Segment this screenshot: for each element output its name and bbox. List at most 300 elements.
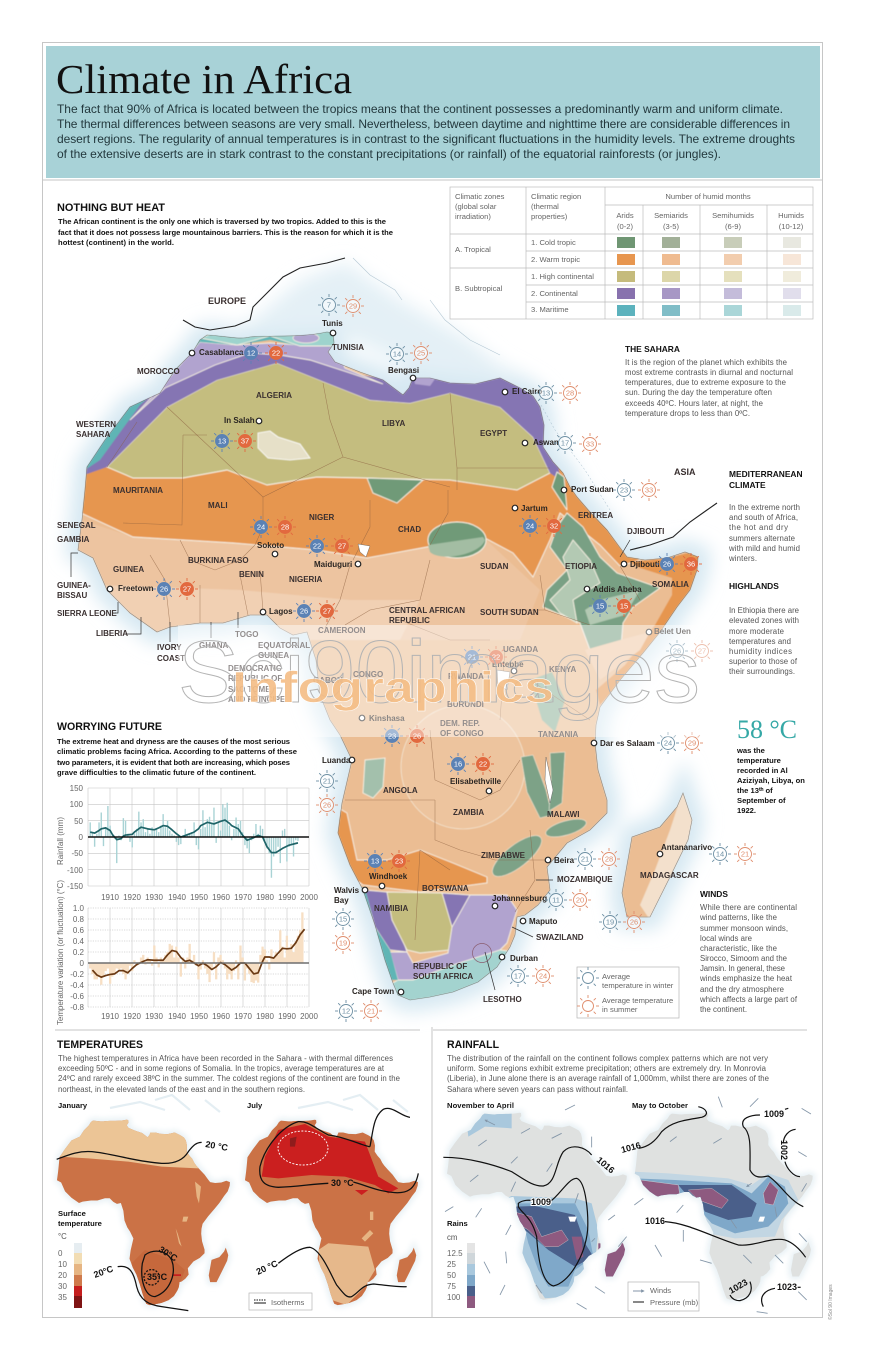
sun icon legend: temperature in winter (602, 981, 674, 990)
region labels west and north: TUNISIA (332, 343, 364, 352)
temperature trend line (92, 929, 305, 977)
highlands text block: In Ethiopia there are (729, 606, 799, 615)
climate zones table: A. Tropical (455, 245, 491, 254)
city names: Bay (334, 896, 349, 905)
country borders (107, 383, 640, 940)
rainfall chart: 1910 (101, 893, 119, 902)
region labels west and north: IVORY (157, 643, 182, 652)
region labels west and north: SAHARA (76, 430, 110, 439)
climate zones table: irradiation) (455, 212, 491, 221)
worrying future text block: WORRYING FUTURE (57, 721, 162, 733)
region labels west and north: REPUBLIC OF (228, 674, 282, 683)
temperature suns: 36 (687, 560, 695, 569)
temperature suns: 26 (160, 585, 168, 594)
city names: Johannesburg (492, 894, 547, 903)
climate zones table: (3-5) (663, 222, 679, 231)
region labels west and north (57, 296, 699, 1004)
temperature variation chart: 1970 (234, 1012, 252, 1021)
region labels west and north: SOMALIA (652, 580, 689, 589)
table swatches (617, 237, 801, 316)
Mediterranean climate text block: CLIMATE (729, 480, 766, 490)
temperature suns: 21 (367, 1007, 375, 1016)
isotherm labels July: 20 °C (255, 1258, 280, 1277)
rainfall heading and text: RAINFALL (447, 1039, 499, 1051)
climate zones table: Semihumids (712, 211, 754, 220)
temperature suns: 16 (454, 760, 462, 769)
region labels west and north: GABON (313, 676, 343, 685)
rains legend: 25 (447, 1260, 456, 1269)
Malawi and Zimbabwe green (487, 752, 588, 883)
rainfall chart: 1950 (190, 893, 208, 902)
city names: El Cairo (512, 387, 542, 396)
nothing but heat text block: hottest (continent) in the world. (58, 238, 174, 247)
Kenya green (530, 672, 565, 732)
temperature suns: 11 (552, 896, 560, 905)
nothing but heat text block: The African continent is the only one which is traversed by two tropics. Added to this is the (58, 217, 386, 226)
region labels west and north: ZAMBIA (453, 808, 484, 817)
the Sahara text block: most extreme contrasts in diurnal and nocturnal (625, 368, 793, 377)
temperature axis labels: 0.6 (73, 926, 85, 935)
temperature suns: 13 (218, 437, 226, 446)
temperature suns: 21 (581, 855, 589, 864)
sun icon legend: Average (602, 972, 630, 981)
city names: Jartum (521, 504, 548, 513)
rainfall chart: 1960 (212, 893, 230, 902)
watermark text: Sci90images (178, 622, 700, 721)
rains legend: cm (447, 1233, 457, 1242)
temperature suns: 29 (688, 739, 696, 748)
rainfall axis labels: 0 (79, 833, 84, 842)
region labels west and north: BOTSWANA (422, 884, 469, 893)
temperature axis labels: 0.4 (73, 937, 85, 946)
highlands text block: more moderate (729, 627, 784, 636)
worrying future text block: grave difficulties to the climatic future of the continent. (57, 768, 256, 777)
region labels west and north: REPUBLIC (389, 616, 430, 625)
region labels west and north: RWANDA (448, 672, 484, 681)
sun icon legend: in summer (602, 1005, 638, 1014)
region labels west and north: DJIBOUTI (627, 527, 664, 536)
temperature variation chart: 1920 (123, 1012, 141, 1021)
rainfall axis labels: -100 (67, 866, 84, 875)
rainfall chart: Rainfall (mm) (56, 817, 65, 865)
leader lines (71, 540, 630, 990)
region labels west and north: EUROPE (208, 296, 246, 306)
the Sahara text block: THE SAHARA (625, 344, 680, 354)
climate zones table: (6-9) (725, 222, 741, 231)
temperature axis labels: -0.2 (70, 970, 85, 979)
temperature suns: 14 (393, 350, 401, 359)
temperature variation chart: 1950 (190, 1012, 208, 1021)
temperature suns: 26 (630, 918, 638, 927)
temperatures heading and text: 24ºC and rarely exceed 38ºC in the summer. The coldest regions of the continent are found in the (58, 1074, 400, 1083)
rivers and lakes (358, 544, 553, 803)
region labels west and north: LIBYA (382, 419, 405, 428)
temperature suns: 13 (542, 389, 550, 398)
worrying future text block: climatic problems facing Africa. According to the patterns of these (57, 747, 297, 756)
temperature suns: 28 (566, 389, 574, 398)
Somalia coastal orange (596, 550, 702, 705)
temperature axis labels: 0.2 (73, 948, 85, 957)
continent with climate zones (60, 320, 702, 1010)
temperature suns: 26 (673, 647, 681, 656)
rainfall axis labels: 100 (70, 800, 84, 809)
warm tropic arid band (82, 467, 641, 578)
surface temperature legend: 0 (58, 1249, 63, 1258)
central Africa light zone (401, 705, 525, 829)
temperature suns: 20 (576, 896, 584, 905)
temperature record callout: the 13ᵗʰ of (737, 786, 773, 795)
intro text: desert regions. The regularity of annual temperatures is in contrast to the significant fluctuations in the humidity levels. The extreme droughts (57, 132, 795, 146)
temperatures heading and text: northeast, in the elevated lands of the east and in the southern regions. (58, 1085, 305, 1094)
region labels west and north: OF CONGO (440, 729, 484, 738)
November to April rain map (443, 1104, 630, 1310)
southern continental zones (365, 890, 407, 952)
temperature record callout: recorded in Al (737, 766, 788, 775)
temperature axis labels: 0.8 (73, 915, 85, 924)
sea halo (78, 262, 698, 1000)
winds text block: Jamsin. In general, these (700, 964, 785, 973)
city names: Freetown (118, 584, 154, 593)
temperature suns: 24 (664, 739, 672, 748)
isotherm labels January: 20°C (92, 1263, 115, 1280)
city names: Casablanca (199, 348, 244, 357)
city names: Tunis (322, 319, 343, 328)
region labels west and north: EGYPT (480, 429, 507, 438)
climate zones table: 1. Cold tropic (531, 238, 576, 247)
May to October rain map (620, 1097, 825, 1315)
climate zones table: (global solar (455, 202, 497, 211)
the Sahara text block: It is the region of the planet which exhibits the (625, 358, 787, 367)
isotherm labels January: 20 °C (205, 1139, 229, 1153)
rainfall heading and text: November to April (447, 1101, 514, 1110)
rainfall chart (56, 784, 318, 902)
winds arrows and pressure (443, 1105, 627, 1309)
region labels west and north: NAMIBIA (374, 904, 408, 913)
temperature record callout: was the (736, 746, 765, 755)
temperature axis labels: -0.6 (70, 992, 85, 1001)
region labels west and north: SAO TOME (228, 685, 271, 694)
climate zones table: 3. Maritime (531, 305, 569, 314)
climate zones table: 2. Warm tropic (531, 255, 580, 264)
main climate map of Africa (57, 258, 756, 1022)
region labels west and north: BURKINA FASO (188, 556, 249, 565)
temperature variation chart (56, 880, 318, 1025)
temperature suns: 27 (338, 542, 346, 551)
region labels west and north: BISSAU (57, 591, 87, 600)
temperature suns: 22 (272, 349, 280, 358)
region labels west and north: GUINEA (258, 651, 289, 660)
rainfall chart: 1990 (278, 893, 296, 902)
July temperature map (240, 1095, 430, 1315)
rains legend: 75 (447, 1282, 456, 1291)
region labels west and north: TANZANIA (538, 730, 579, 739)
region labels west and north: CONGO (353, 670, 383, 679)
the Sahara text block: sun. During the day the temperature often (625, 388, 772, 397)
rainfall chart: 2000 (300, 893, 318, 902)
region labels west and north: DEMOCRATIC (228, 664, 282, 673)
pressure labels May-Oct: 1023 (777, 1282, 797, 1292)
temperature suns: 33 (586, 440, 594, 449)
highlands text block: humidity indices (729, 647, 792, 656)
climate zones table: B. Subtropical (455, 284, 503, 293)
region labels west and north: GUINEA- (57, 581, 91, 590)
surface temperature legend: 35 (58, 1293, 67, 1302)
rainfall axis labels: 50 (74, 817, 84, 826)
pressure labels May-Oct: 1016 (645, 1216, 665, 1226)
region labels west and north: SIERRA LEONE (57, 609, 117, 618)
city names: Lagos (269, 607, 293, 616)
temperatures heading and text: exceeding 50ºC - and in some regions of Somalia. In the tropics, average temperatures are at (58, 1064, 385, 1073)
region labels west and north: MOZAMBIQUE (557, 875, 613, 884)
climate zones table: Semiarids (654, 211, 688, 220)
city names: Djibouti (630, 560, 660, 569)
climate zones table: (10-12) (779, 222, 804, 231)
July isotherms (260, 1108, 418, 1297)
temperatures heading and text: The highest temperatures in Africa have been recorded in the Sahara - with thermal differences (58, 1054, 393, 1063)
sun icon legend: Average temperature (602, 996, 673, 1005)
region labels west and north: TOGO (235, 630, 258, 639)
Sahara high continental zone (107, 363, 550, 490)
rainfall axis labels: -150 (67, 882, 84, 891)
temperature suns: 24 (257, 523, 265, 532)
city names: Port Sudan (571, 485, 614, 494)
Mediterranean climate text block: and south of Africa, (729, 513, 798, 522)
watermark lightened band (178, 625, 723, 737)
climate zones table: (0-2) (617, 222, 633, 231)
city names: Sokoto (257, 541, 284, 550)
temperature suns: 26 (663, 560, 671, 569)
temperature variation chart: 1960 (212, 1012, 230, 1021)
rains legend: 100 (447, 1293, 461, 1302)
city names: Dar es Salaam (600, 739, 655, 748)
highlands text block: their surroundings. (729, 667, 795, 676)
temperature bars (90, 912, 305, 985)
temperature suns: 27 (323, 607, 331, 616)
Angola green (363, 758, 385, 798)
isotherms legend (249, 1293, 312, 1310)
temperature suns: 33 (645, 486, 653, 495)
January temperature map (54, 1094, 234, 1312)
climate zones table: Number of humid months (665, 192, 751, 201)
pressure labels Nov-Apr: 1016 (595, 1155, 616, 1175)
rainfall trend line (90, 820, 298, 853)
rainfall chart: 1920 (123, 893, 141, 902)
region labels west and north: DEM. REP. (440, 719, 480, 728)
temperature suns: 12 (247, 349, 255, 358)
isotherm labels July: 30 °C (331, 1178, 354, 1188)
credit: ©Sol 90 Images (827, 1284, 834, 1320)
isotherms legend: Isotherms (271, 1298, 305, 1307)
climate zones table (450, 187, 813, 319)
city names: In Salah (224, 416, 255, 425)
intro text: of the extensive deserts are in stark contrast to the constant precipitations (or rainfall) of the equatorial rainforests (or jungles). (57, 147, 721, 161)
rainfall heading and text: (Liberia), in June alone there is an average rainfall of 1,000mm, whilst there are zones of the (447, 1074, 769, 1083)
rainfall heading and text: Sahara where seven years can pass without rainfall. (447, 1085, 628, 1094)
temperature suns: 26 (413, 732, 421, 741)
worrying future text block: two parameters, it is evident that both are increasing, which poses (57, 758, 290, 767)
temperature axis labels: -0.4 (70, 981, 85, 990)
region labels west and north: ETIOPIA (565, 562, 597, 571)
city names: Maiduguri (314, 560, 352, 569)
temperature suns: 19 (339, 939, 347, 948)
pressure labels May-Oct: 1023 (727, 1277, 749, 1296)
temperature suns: 29 (349, 302, 357, 311)
region labels west and north: GAMBIA (57, 535, 90, 544)
winds text block: While there are continental (700, 903, 797, 912)
rains legend: 12.5 (447, 1249, 463, 1258)
section dividers (55, 1027, 807, 1318)
temperature variation chart: 1940 (168, 1012, 186, 1021)
rainfall chart: 1970 (234, 893, 252, 902)
city names: Cape Town (352, 987, 394, 996)
city names: Durban (510, 954, 538, 963)
surface temperature legend: 10 (58, 1260, 67, 1269)
temperature suns: 17 (514, 972, 522, 981)
climate zones table: Climatic zones (455, 192, 505, 201)
watermark text: Infographics (232, 663, 554, 712)
the Sahara text block: exceeds 40ºC. Hours later, at night, the (625, 399, 763, 408)
climate zones table: Arids (616, 211, 634, 220)
temperature suns: 21 (741, 850, 749, 859)
region labels west and north: ERITREA (578, 511, 613, 520)
temperatures heading and text: January (58, 1101, 88, 1110)
temperature suns: 23 (395, 857, 403, 866)
region labels west and north: ANGOLA (383, 786, 418, 795)
region labels west and north: SOUTH SUDAN (480, 608, 539, 617)
city names: Elisabethville (450, 777, 502, 786)
surface temperature legend: temperature (58, 1219, 102, 1228)
southern arid zone (330, 803, 487, 892)
temperature suns: 37 (241, 437, 249, 446)
city names: Entebbe (492, 660, 524, 669)
region labels west and north: EQUATORIAL (258, 641, 310, 650)
region labels west and north: SENEGAL (57, 521, 96, 530)
worrying future text block (57, 721, 297, 777)
temperature suns: 17 (561, 439, 569, 448)
region labels west and north: SWAZILAND (536, 933, 584, 942)
highlands text block: superior to those of (729, 657, 798, 666)
Mediterranean climate text block (728, 469, 803, 563)
region labels west and north: BENIN (239, 570, 264, 579)
temperature suns: 26 (323, 801, 331, 810)
pressure labels May-Oct: 1009 (764, 1109, 784, 1119)
winds and pressure legend: Pressure (mb) (650, 1298, 699, 1307)
rains legend: 50 (447, 1271, 456, 1280)
temperature record callout: 58 °C (737, 715, 797, 744)
Madagascar east light strip (640, 794, 692, 918)
rainfall axis labels: -50 (71, 849, 84, 858)
temperature variation chart: 1990 (278, 1012, 296, 1021)
temperature axis labels: 1.0 (73, 904, 85, 913)
temperature variation chart: 1910 (101, 1012, 119, 1021)
winds and pressure legend: Winds (650, 1286, 671, 1295)
temperature record callout: September of (737, 796, 786, 805)
nothing but heat text block (57, 202, 393, 247)
region labels west and north: CHAD (398, 525, 421, 534)
temperature suns: 32 (550, 522, 558, 531)
temperature variation chart: 1930 (145, 1012, 163, 1021)
city names: Kinshasa (369, 714, 405, 723)
city markers (107, 330, 663, 995)
region labels west and north: BURUNDI (447, 700, 484, 709)
region labels west and north: MAURITANIA (113, 486, 163, 495)
rainfall axis labels: 150 (70, 784, 84, 793)
nothing but heat text block: fact that it does not possess large mountainous barriers. This is the reason for which it is the (58, 228, 393, 237)
surface temperature legend: 30 (58, 1282, 67, 1291)
rainfall bars (90, 803, 298, 878)
region labels west and north: MOROCCO (137, 367, 180, 376)
climate zones table: 2. Continental (531, 289, 578, 298)
winds text block: wind patterns, like the (699, 913, 777, 922)
region labels west and north: CAMEROON (318, 626, 366, 635)
temperatures heading and text: July (247, 1101, 263, 1110)
temperature variation chart: 1980 (256, 1012, 274, 1021)
region labels west and north: UGANDA (503, 645, 538, 654)
rainfall heading and text: uniform. Some regions exhibit extreme precipitation; others are extremely dry. In Monrovia (447, 1064, 767, 1073)
city names: Antananarivo (661, 843, 712, 852)
maritime zone (86, 336, 331, 469)
temperature suns: 15 (339, 915, 347, 924)
nothing but heat text block: NOTHING BUT HEAT (57, 202, 165, 214)
region labels west and north: CENTRAL AFRICAN (389, 606, 465, 615)
city names: Windhoek (369, 872, 408, 881)
title: Climate in Africa (56, 56, 352, 102)
temperature suns: 22 (313, 542, 321, 551)
city names: Belet Uen (654, 627, 691, 636)
region labels west and north: LESOTHO (483, 995, 522, 1004)
highlands text block: temperatures and (729, 637, 791, 646)
winds text block: and the dry atmosphere (700, 985, 784, 994)
winds and pressure legend (628, 1282, 699, 1311)
surface temperature legend: Surface (58, 1209, 86, 1218)
rainfall heading and text: May to October (632, 1101, 688, 1110)
winds text block: WINDS (700, 889, 728, 899)
surface temperature legend: 20 (58, 1271, 67, 1280)
sun icon legend (577, 967, 679, 1018)
climate zones table: Climatic region (531, 192, 581, 201)
temperature axis labels (70, 904, 85, 1012)
region labels west and north: COAST (157, 654, 185, 663)
Mediterranean climate text block: with mild and humid (728, 544, 800, 553)
temperature suns: 23 (620, 486, 628, 495)
isotherm labels July (255, 1178, 354, 1277)
tropic green highlands (367, 478, 423, 503)
region labels west and north: KENYA (549, 665, 576, 674)
winds text block: the continent. (700, 1005, 747, 1014)
temperature suns: 15 (620, 602, 628, 611)
temperatures heading and text: TEMPERATURES (57, 1039, 143, 1051)
region labels west and north: MALAWI (547, 810, 579, 819)
city names: Aswan (533, 438, 559, 447)
temperature suns: 22 (479, 760, 487, 769)
rainfall heading and text: The distribution of the rainfall on the continent follows complex patterns which are not very (447, 1054, 768, 1063)
region labels west and north: ZIMBABWE (481, 851, 526, 860)
temperature suns: 21 (323, 777, 331, 786)
intro text: The thermal differences between seasons are very small. Nevertheless, between daytime and nighttime there are considerable differences in (57, 117, 790, 131)
city names: Maputo (529, 917, 558, 926)
temperature suns: 22 (492, 653, 500, 662)
climate zones table: properties) (531, 212, 568, 221)
winds text block (699, 889, 798, 1014)
temperature suns: 27 (698, 647, 706, 656)
region labels west and north: AND PRINCIPE (228, 695, 286, 704)
temperature suns: 24 (526, 522, 534, 531)
city names: Beira (554, 856, 575, 865)
region labels west and north: MALI (208, 501, 228, 510)
rains legend (447, 1219, 475, 1308)
isotherm labels January (92, 1139, 229, 1282)
winds arrows and pressure (634, 1097, 811, 1313)
